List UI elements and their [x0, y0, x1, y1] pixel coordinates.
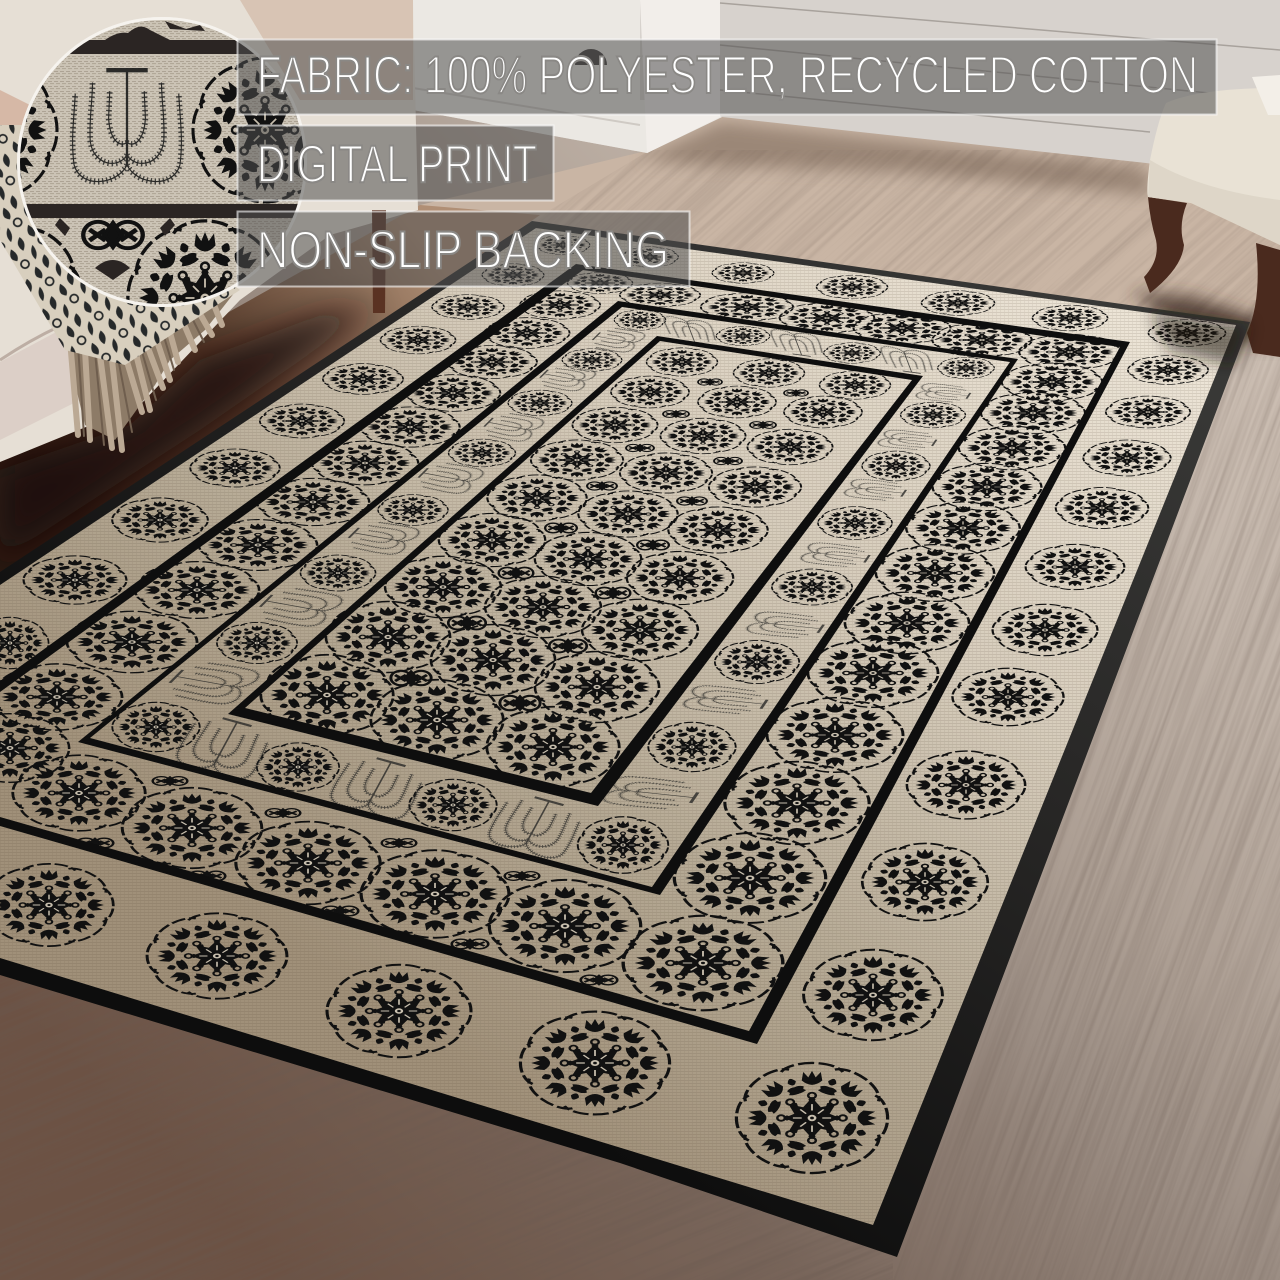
rug [0, 221, 1250, 1257]
patterned band [0, 272, 1121, 1010]
inset detail circle [17, 17, 307, 307]
label: print [238, 126, 554, 200]
label: backing [238, 212, 690, 286]
label: backing: NON-SLIP BACKING [257, 221, 669, 280]
outer black frame line [0, 264, 1130, 1044]
ottoman legs [1144, 197, 1280, 357]
willow band medallions [112, 310, 994, 873]
middle black frame line [78, 301, 1018, 895]
top black bar [70, 40, 254, 54]
sofa [0, 0, 418, 462]
throw blanket with fringe [0, 125, 240, 450]
willow enlarged [73, 70, 181, 182]
label: print: DIGITAL PRINT [257, 135, 537, 194]
ottoman [1144, 75, 1280, 357]
white cabinet and wall [413, 0, 1280, 180]
bottom black bar [19, 204, 305, 218]
black binding [0, 221, 1250, 1257]
book on ottoman [1252, 75, 1280, 115]
tan field [0, 228, 1236, 1225]
central field pattern [261, 348, 890, 787]
central black frame line [228, 336, 923, 806]
outer medallion border [0, 235, 1226, 1173]
sofa leg [372, 210, 386, 313]
willow tree motifs [159, 315, 974, 861]
partial medallions [191, 57, 304, 204]
fringe [70, 292, 235, 450]
